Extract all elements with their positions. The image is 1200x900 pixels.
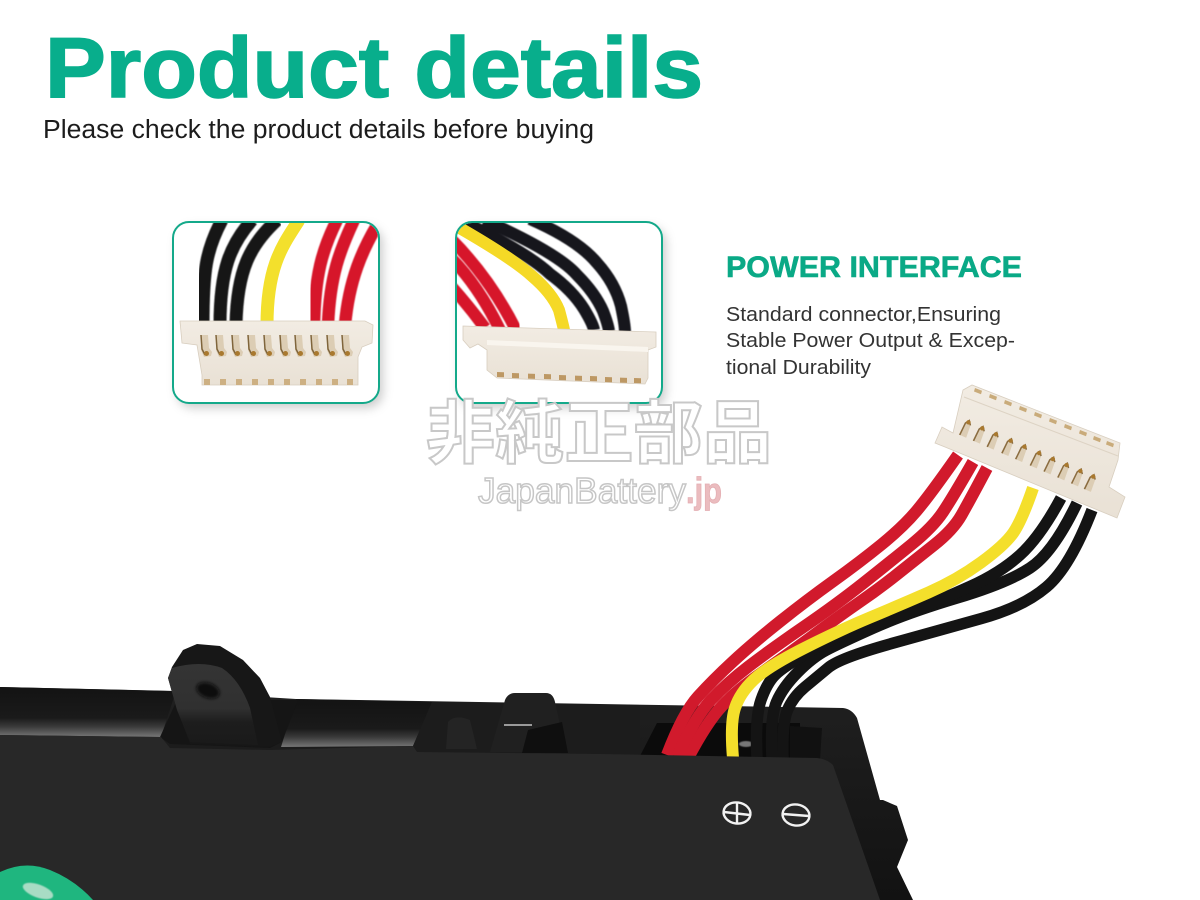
connector housing [463, 326, 656, 384]
large connector [935, 385, 1125, 518]
terminal opening [640, 723, 822, 760]
black wires [460, 219, 625, 332]
black wires [203, 220, 277, 325]
icon: positive terminal mark [722, 801, 752, 825]
icon: negative terminal mark [781, 803, 811, 827]
battery front face [0, 735, 880, 900]
clips [413, 693, 640, 756]
description text: tional Durability [726, 357, 871, 379]
recessed notch [160, 700, 298, 748]
green label [0, 865, 93, 900]
watermark: JapanBattery [478, 470, 686, 511]
inset card: connector front view [173, 220, 379, 403]
red wires [450, 238, 516, 330]
battery pack [0, 644, 913, 900]
battery top side strip [0, 687, 913, 900]
yellow wire [458, 227, 564, 330]
watermark: 非純正部品 [426, 377, 772, 477]
wire bundle [667, 455, 1092, 758]
yellow wire [732, 488, 1033, 758]
strip highlights [0, 687, 432, 747]
red wires [314, 220, 379, 325]
title: Product details [45, 21, 703, 116]
yellow wire [267, 220, 299, 325]
description text [726, 304, 1015, 379]
black wires [756, 498, 1092, 758]
description text: Standard connector,Ensuring [726, 304, 1001, 326]
inset card: connector back view [450, 219, 662, 403]
watermark: .jp [686, 470, 722, 511]
mounting tab [168, 644, 282, 747]
heading: power interface: POWER INTERFACE [726, 251, 1022, 284]
red wires [667, 455, 987, 758]
description text: Stable Power Output & Excep- [726, 330, 1015, 352]
connector housing [180, 321, 373, 385]
subtitle: Please check the product details before buying [43, 116, 594, 144]
